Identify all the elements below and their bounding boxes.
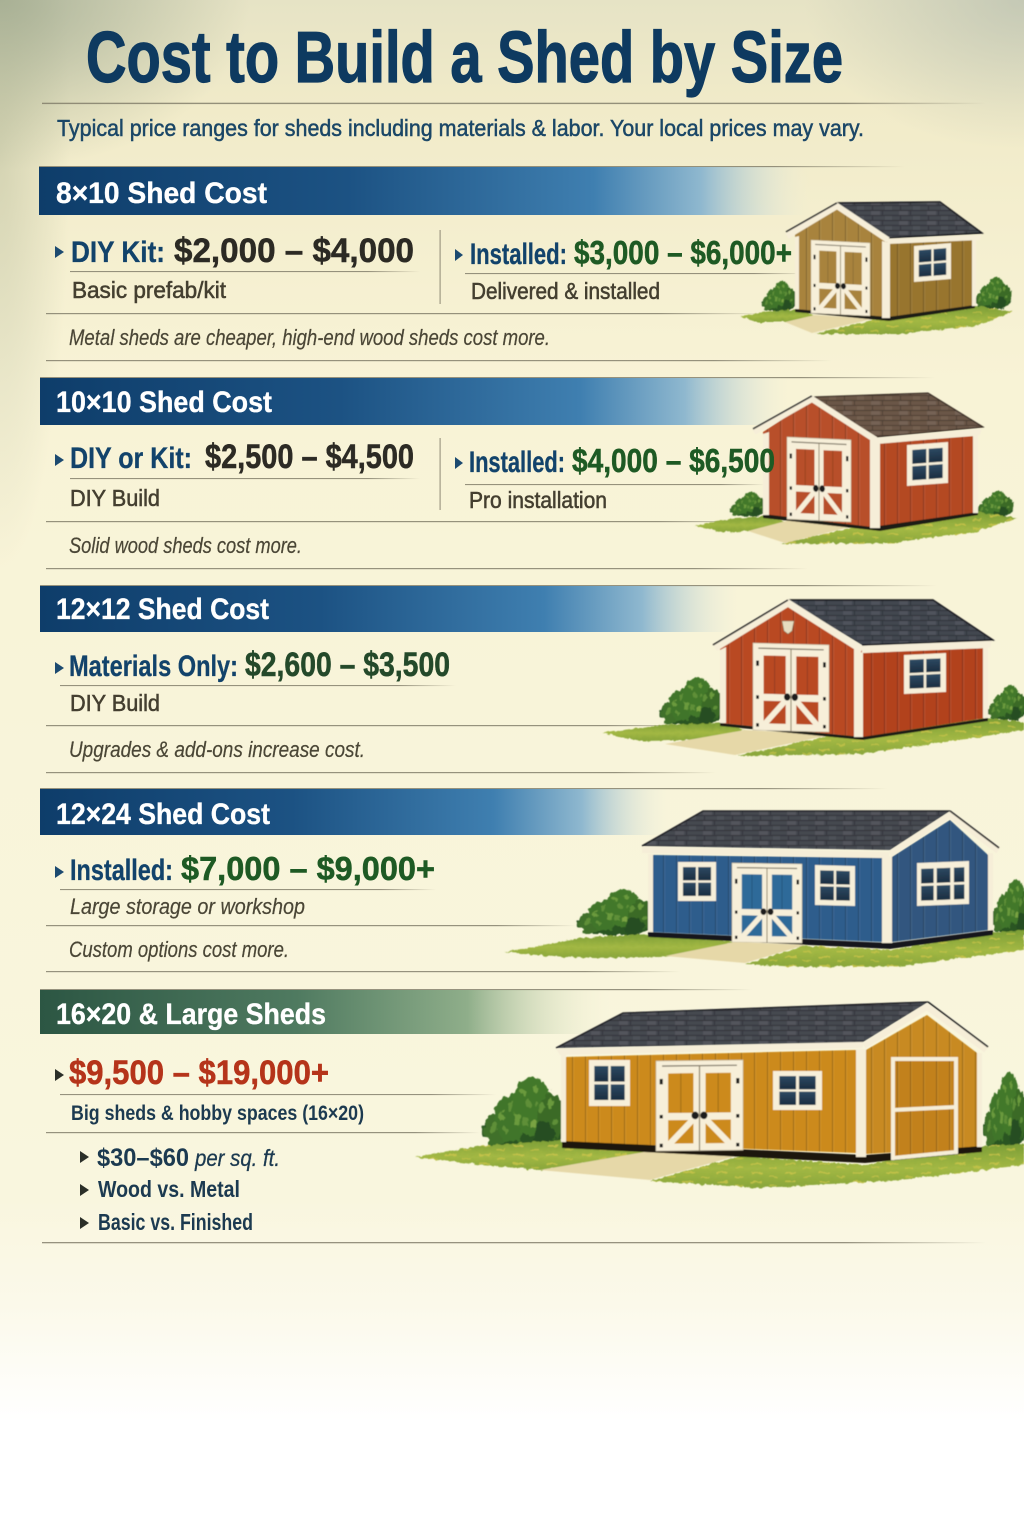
header bar: 12×24 bbox=[40, 789, 670, 835]
price: large shed range: Big sheds & hobby spaces (16×20) bbox=[71, 1102, 364, 1125]
price: installed bbox=[55, 850, 435, 919]
subtitle: Typical price ranges for sheds including materials & labor. Your local prices may vary. bbox=[57, 115, 864, 141]
header bar: 16×20: 16×20 & Large Sheds bbox=[56, 998, 326, 1031]
left price: DIY kit: Basic prefab/kit bbox=[72, 277, 227, 303]
panel: 16×20 and large sheds bbox=[40, 989, 1024, 1243]
header bar: 8×10: 8×10 Shed Cost bbox=[56, 177, 267, 210]
header bar: 10×10: 10×10 Shed Cost bbox=[56, 386, 272, 419]
header bar: 12×24: 12×24 Shed Cost bbox=[56, 798, 270, 831]
panel: 12×24 shed cost bbox=[40, 788, 1024, 972]
left price: DIY kit: DIY Kit: bbox=[71, 236, 165, 269]
note: Upgrades & add-ons increase cost. bbox=[69, 737, 365, 762]
price: installed: Large storage or workshop bbox=[70, 894, 305, 919]
header bar: 8×10 bbox=[39, 167, 809, 215]
icon: gable ornament bbox=[782, 621, 794, 634]
note: Metal sheds are cheaper, high-end wood sheds cost more. bbox=[69, 325, 550, 350]
right price: installed bbox=[455, 234, 792, 304]
note: Custom options cost more. bbox=[69, 937, 289, 962]
left price: DIY or kit: $2,500 – $4,500 bbox=[205, 438, 414, 476]
price: materials only bbox=[55, 646, 450, 716]
illustration: red 12×12 shed bbox=[602, 600, 1024, 756]
left price: DIY or kit: DIY or Kit: bbox=[70, 442, 192, 475]
price: installed: $7,000 – $9,000+ bbox=[181, 850, 435, 887]
right price: installed: Delivered & installed bbox=[471, 278, 660, 304]
illustration: red 10×10 shed bbox=[695, 393, 1017, 544]
illustration: tan 8×10 shed bbox=[740, 202, 1013, 334]
header bar: 12×12: 12×12 Shed Cost bbox=[56, 593, 269, 626]
list: cost factors: Basic vs. Finished bbox=[98, 1209, 253, 1235]
right price: installed: Pro installation bbox=[469, 487, 607, 513]
list: cost factors: $30–$60 bbox=[97, 1144, 189, 1172]
panel: 12×12 shed cost bbox=[40, 585, 1024, 773]
left price: DIY or kit bbox=[55, 438, 414, 511]
right price: installed bbox=[455, 442, 775, 513]
price: materials only: DIY Build bbox=[70, 690, 160, 716]
price: materials only: $2,600 – $3,500 bbox=[245, 646, 450, 684]
note: Solid wood sheds cost more. bbox=[69, 533, 302, 558]
price: installed: Installed: bbox=[70, 854, 173, 887]
right price: installed: $4,000 – $6,500 bbox=[572, 442, 775, 479]
list: cost factors: per sq. ft. bbox=[194, 1145, 280, 1171]
right price: installed: Installed: bbox=[470, 238, 567, 271]
panel: 10×10 shed cost bbox=[40, 377, 1017, 569]
header bar: 10×10 bbox=[40, 378, 790, 425]
left price: DIY or kit: DIY Build bbox=[70, 485, 160, 511]
list: cost factors: Wood vs. Metal bbox=[98, 1176, 240, 1202]
side door bbox=[893, 1059, 956, 1158]
right price: installed: $3,000 – $6,000+ bbox=[574, 234, 792, 271]
illustration: yellow 16×20 shed bbox=[415, 1002, 1024, 1188]
left price: DIY kit: $2,000 – $4,000 bbox=[174, 232, 414, 270]
header bar: 12×12 bbox=[40, 586, 740, 632]
left price: DIY kit bbox=[55, 232, 414, 303]
illustration: blue 12×24 shed bbox=[505, 811, 1024, 967]
price: large shed range bbox=[55, 1054, 364, 1125]
list: cost factors bbox=[80, 1144, 280, 1235]
right price: installed: Installed: bbox=[469, 446, 565, 479]
price: large shed range: $9,500 – $19,000+ bbox=[69, 1054, 329, 1092]
panel: 8×10 shed cost bbox=[39, 166, 1013, 361]
price: materials only: Materials Only: bbox=[69, 650, 238, 683]
header bar: 16×20 bbox=[40, 990, 610, 1034]
